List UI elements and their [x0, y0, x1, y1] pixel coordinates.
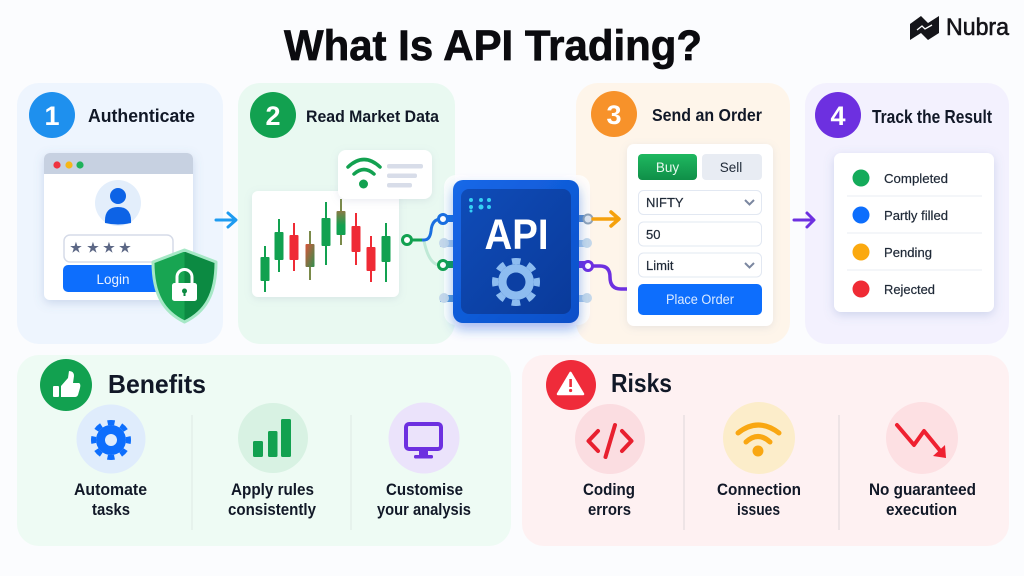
risk: coding errors	[575, 404, 645, 519]
heading: send an order: Send an Order	[652, 105, 762, 125]
status list: Completed	[884, 171, 948, 186]
status list: Partly filled	[884, 208, 948, 223]
benefit: customise your analysis	[377, 402, 471, 519]
order form	[627, 144, 773, 326]
step number 1: 1	[44, 101, 60, 131]
benefit: customise your analysis: your analysis	[377, 501, 471, 519]
heading: risks: Risks	[611, 368, 672, 398]
title: What Is API Trading?	[284, 22, 702, 70]
arrow: step 1 to 2	[216, 213, 236, 227]
heading: read market data: Read Market Data	[306, 108, 440, 126]
benefit: automate tasks: Automate	[74, 481, 147, 499]
heading: benefits: Benefits	[108, 369, 206, 399]
step number 4	[815, 92, 861, 138]
risk: connection issues: issues	[737, 501, 780, 519]
panel: step 2 read market data	[238, 83, 455, 344]
chip pins	[438, 214, 592, 303]
benefit: apply rules consistently: Apply rules	[231, 481, 314, 499]
benefit: automate tasks: tasks	[92, 501, 130, 519]
data feed card	[338, 150, 432, 199]
step number 2	[250, 92, 296, 138]
logo: Nubra: Nubra	[946, 14, 1010, 41]
step number 1	[29, 92, 75, 138]
step number 4: 4	[830, 101, 846, 131]
login window	[44, 153, 193, 300]
connector: API to order (orange)	[593, 212, 619, 226]
panel: step 3 send an order	[576, 83, 790, 344]
candlestick chart	[252, 191, 399, 297]
login window: Login	[96, 272, 130, 287]
API chip	[438, 175, 592, 325]
icon: thumbs up	[40, 359, 92, 411]
order form: Place Order	[666, 292, 734, 307]
connector: API to place order (purple)	[593, 266, 627, 289]
benefit: apply rules consistently: consistently	[228, 501, 317, 519]
icon: gear	[495, 261, 537, 303]
order form: Limit	[646, 258, 674, 273]
panel: risks	[522, 355, 1009, 546]
chip indicator dots	[469, 198, 491, 212]
order form: NIFTY	[646, 195, 684, 210]
icon: security shield	[153, 250, 216, 322]
panel: benefits	[17, 355, 511, 546]
icon: warning	[546, 360, 596, 410]
risk: no guaranteed execution: execution	[886, 501, 957, 519]
login window: ★	[103, 240, 115, 255]
login window: ★	[70, 240, 82, 255]
panel: step 4 track the result	[805, 83, 1009, 344]
step number 2: 2	[265, 101, 281, 131]
arrow: step 3 to 4	[794, 213, 814, 227]
step number 3: 3	[606, 100, 622, 130]
risk: coding errors: errors	[588, 501, 631, 519]
panel: step 1 authenticate	[17, 83, 223, 344]
heading: authenticate: Authenticate	[88, 105, 195, 126]
risk: coding errors: Coding	[583, 481, 635, 499]
order form: Buy	[656, 160, 679, 175]
connectors: chart to API	[402, 219, 441, 265]
heading: track the result: Track the Result	[872, 107, 992, 127]
benefit: customise your analysis: Customise	[386, 481, 463, 499]
login window: ★	[87, 240, 99, 255]
risk: no guaranteed execution: No guaranteed	[869, 481, 976, 499]
step number 3	[591, 91, 637, 137]
status list: Rejected	[884, 282, 935, 297]
risk: no guaranteed execution	[869, 402, 976, 519]
benefit: apply rules consistently	[228, 403, 317, 519]
risk: connection issues	[717, 402, 801, 519]
chip label: API	[484, 211, 548, 259]
order form: 50	[646, 227, 660, 242]
login window: ★	[119, 240, 131, 255]
benefit: automate tasks	[74, 404, 147, 519]
order form: Sell	[720, 160, 742, 175]
risk: connection issues: Connection	[717, 481, 801, 499]
status list: Pending	[884, 245, 932, 260]
status list	[834, 153, 994, 312]
logo: Nubra	[910, 14, 1010, 41]
